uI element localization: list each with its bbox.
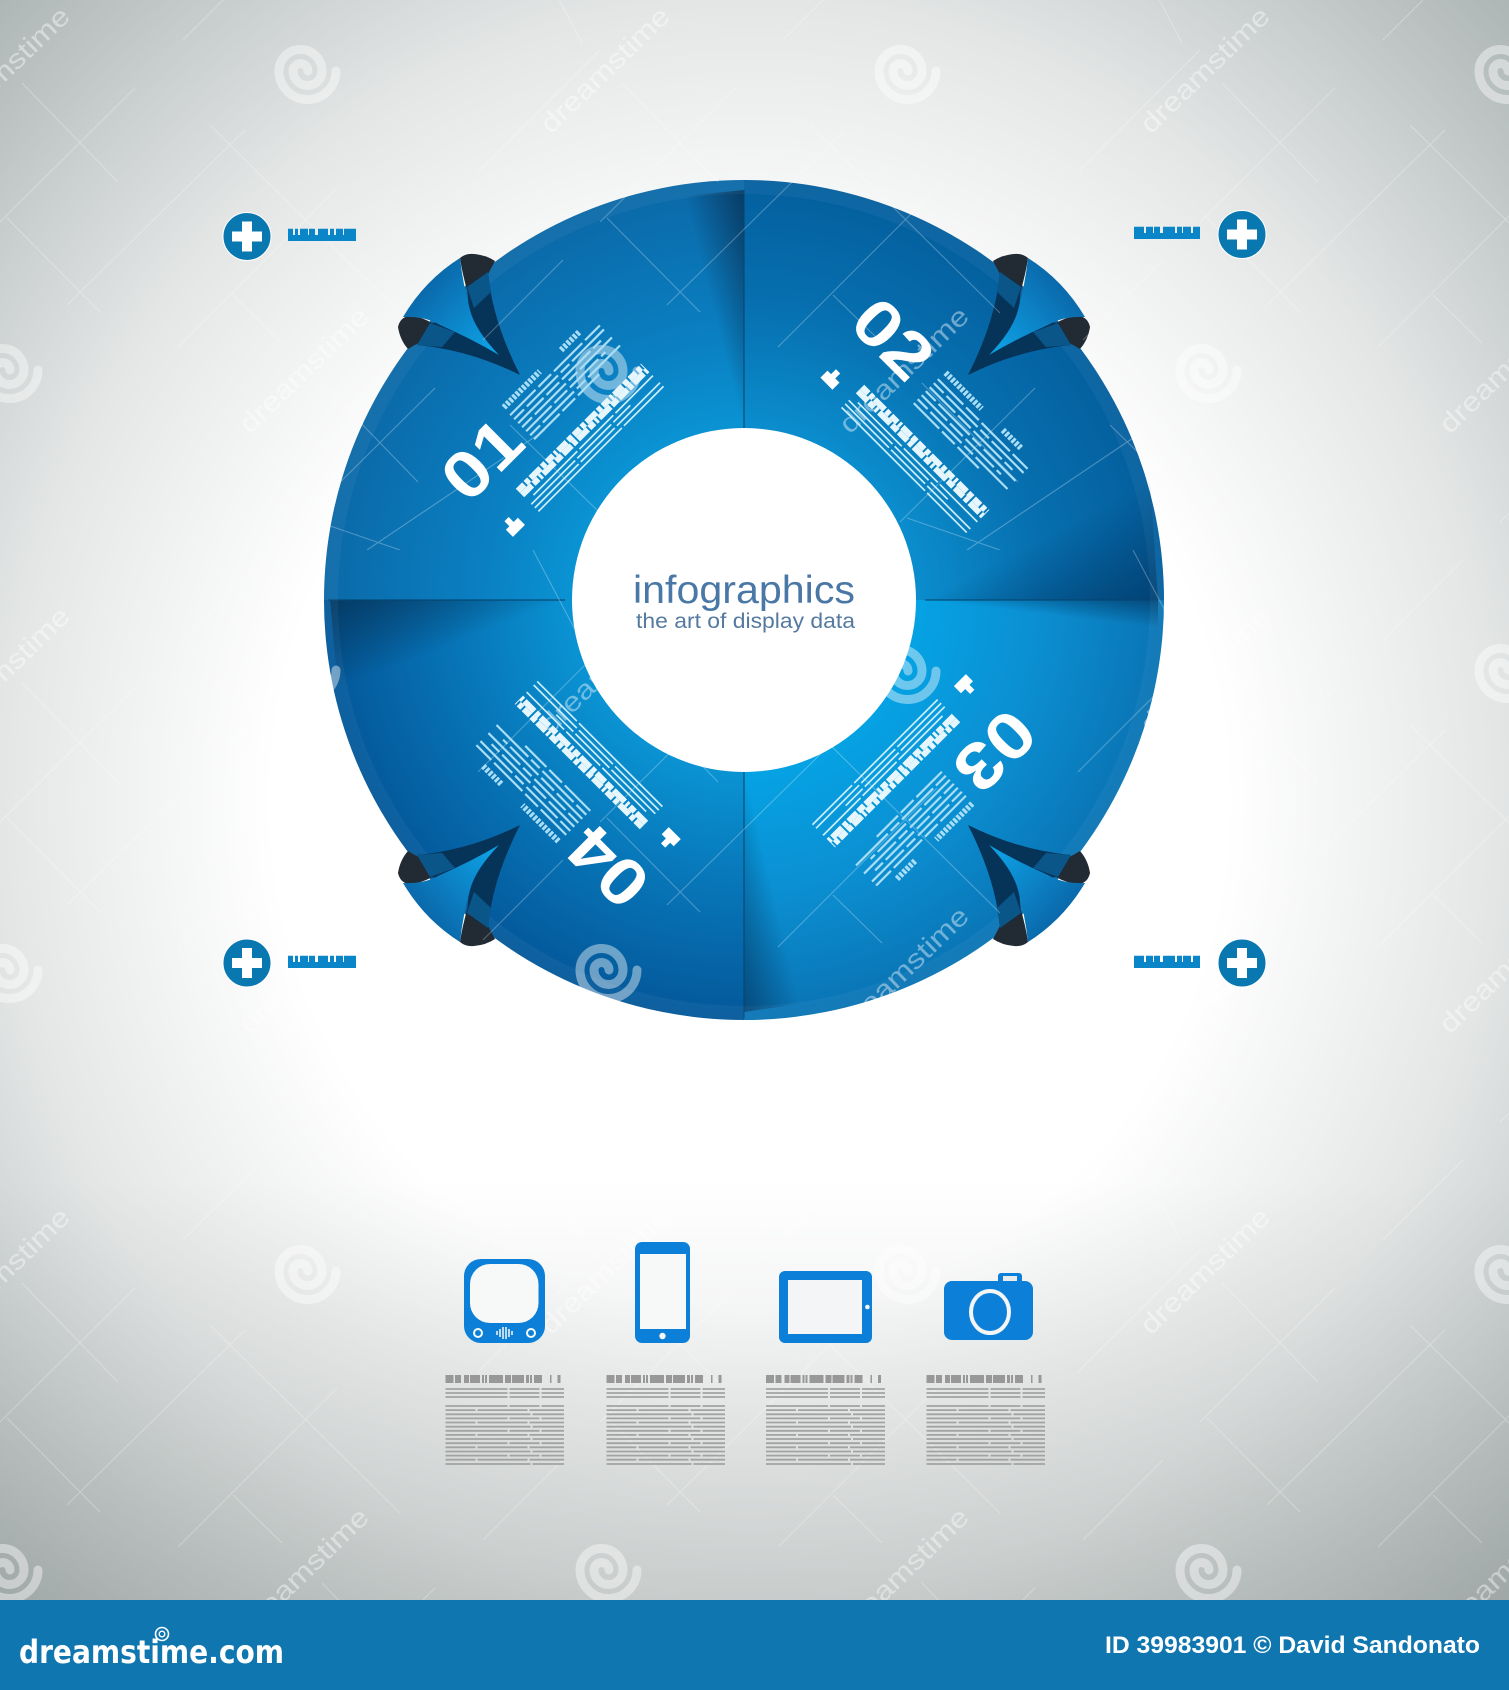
plus callout: bottom left xyxy=(223,939,356,987)
footer credit: ID 39983901 © David Sandonato xyxy=(1105,1632,1480,1659)
curl: top left xyxy=(398,254,520,375)
watermark spirals and lines: dreamstime xyxy=(1134,1,1276,139)
panel: quadrant 4 xyxy=(324,600,744,1020)
watermark spirals and lines: dreamstime xyxy=(833,901,975,1039)
panel: quadrant 1 xyxy=(324,180,744,600)
watermark spirals and lines: dreamstime xyxy=(1134,601,1276,739)
curl: top right xyxy=(968,254,1090,375)
watermark spirals and lines: dreamstime xyxy=(233,901,375,1039)
icon: phone xyxy=(635,1242,690,1343)
segment 04 content xyxy=(454,681,695,923)
center hole xyxy=(572,428,916,772)
center title xyxy=(633,569,855,633)
watermark spirals and lines: dreamstime xyxy=(534,1,676,139)
text block 2 xyxy=(606,1379,725,1464)
number 03: 03 xyxy=(939,695,1051,807)
plus callout: top left xyxy=(223,212,356,260)
icon: tablet xyxy=(779,1271,872,1343)
footer bar xyxy=(0,1600,1509,1690)
watermark spirals and lines: dreamstime xyxy=(1134,1202,1276,1340)
number 02: 02 xyxy=(837,283,949,395)
heading: infographics: infographics xyxy=(633,569,855,612)
watermark spirals and lines: dreamstime xyxy=(833,301,975,439)
curl: bottom right xyxy=(968,825,1090,946)
segment 02 content xyxy=(803,283,1053,533)
watermark spirals and lines: dreamstime xyxy=(233,301,375,439)
circular diagram xyxy=(324,180,1164,1020)
text block 4 xyxy=(926,1379,1045,1464)
segment 01 content xyxy=(426,306,664,543)
subtitle: the art of display data xyxy=(636,610,855,633)
number 04: 04 xyxy=(552,811,664,923)
icon: camera xyxy=(944,1273,1033,1340)
footer logo: dreamstime.com xyxy=(19,1633,284,1671)
panel: quadrant 3 xyxy=(744,600,1164,1020)
icon: television xyxy=(464,1259,545,1343)
watermark spirals and lines: dreamstime xyxy=(534,1202,676,1340)
curl: bottom left xyxy=(398,825,520,946)
plus callout: bottom right xyxy=(1134,939,1266,987)
text block 3 xyxy=(766,1379,885,1464)
segment 03 content xyxy=(812,667,1051,905)
watermark spirals and lines: dreamstime xyxy=(833,1502,975,1640)
watermark spirals and lines: dreamstime xyxy=(233,1502,375,1640)
number 01: 01 xyxy=(426,403,538,515)
watermark spirals and lines: dreamstime xyxy=(534,601,676,739)
panel: quadrant 2 xyxy=(744,180,1164,600)
text block 1 xyxy=(446,1379,564,1464)
plus callout: top right xyxy=(1134,210,1266,258)
